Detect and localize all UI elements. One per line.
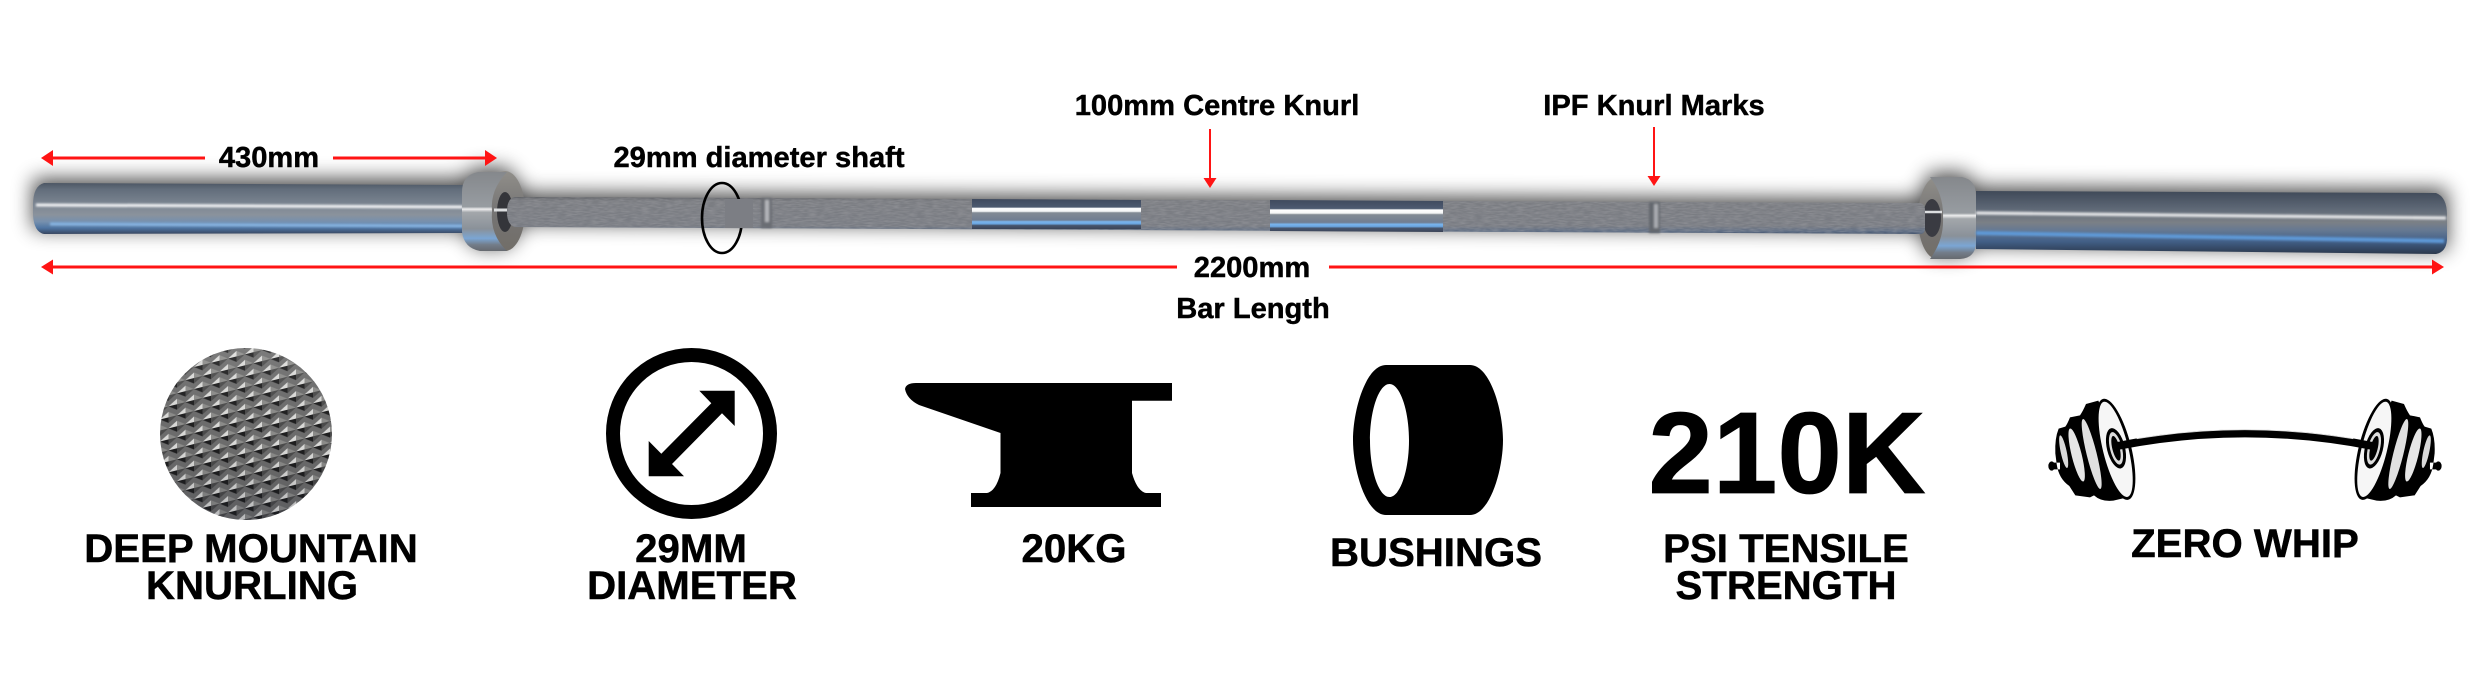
arrow: centre knurl xyxy=(1204,129,1216,188)
arrow: 2200mm bar length xyxy=(41,260,2444,274)
left IPF mark xyxy=(761,198,772,228)
icon: diameter xyxy=(613,355,770,512)
right collar back face xyxy=(1918,177,1956,259)
label: psi tensile strength xyxy=(1663,526,1909,608)
right plates xyxy=(2347,395,2442,504)
label: deep mountain knurling: DEEP MOUNTAIN xyxy=(84,526,418,571)
left plates xyxy=(2048,395,2143,504)
shaft patch over ring xyxy=(725,199,753,228)
label: 430mm: 430mm xyxy=(219,142,319,174)
smooth section right xyxy=(1270,200,1443,232)
bar drop shadow xyxy=(33,168,2447,255)
label: psi tensile strength: STRENGTH xyxy=(1675,563,1897,608)
label: zero whip: ZERO WHIP xyxy=(2131,521,2359,566)
right sleeve xyxy=(1976,191,2447,254)
arrow: IPF marks xyxy=(1648,127,1660,186)
label: Bar Length: Bar Length xyxy=(1176,293,1330,325)
label: deep mountain knurling: KNURLING xyxy=(146,563,358,608)
left sleeve xyxy=(33,183,463,234)
right collar body xyxy=(1925,177,1976,259)
29mm diameter ring xyxy=(702,183,742,253)
label: 29mm diameter shaft: 29mm diameter shaft xyxy=(613,142,905,174)
barbell photo xyxy=(33,168,2447,259)
label: 20kg: 20KG xyxy=(1022,526,1126,571)
label: IPF Knurl Marks: IPF Knurl Marks xyxy=(1543,90,1765,122)
label: 100mm Centre Knurl: 100mm Centre Knurl xyxy=(1075,90,1359,122)
stat: 210K: 210K xyxy=(1648,388,1926,518)
left collar xyxy=(462,171,525,251)
icon: whipping barbell xyxy=(2048,395,2442,504)
label: 29mm diameter xyxy=(587,526,797,608)
label: 29mm diameter: 29MM xyxy=(635,526,747,571)
icon: anvil 20kg xyxy=(905,383,1172,507)
arrow: 430mm sleeve length xyxy=(41,150,497,166)
knurled shaft xyxy=(507,197,1925,234)
label: deep mountain knurling xyxy=(84,526,418,608)
icon: bushing xyxy=(1353,365,1503,515)
curved bar xyxy=(2117,430,2373,446)
label: psi tensile strength: PSI TENSILE xyxy=(1663,526,1909,571)
label: bushings: BUSHINGS xyxy=(1330,530,1542,575)
icon: knurling texture xyxy=(160,348,332,520)
label: 29mm diameter: DIAMETER xyxy=(587,563,797,608)
label: 2200mm: 2200mm xyxy=(1194,252,1310,284)
right IPF mark xyxy=(1649,202,1660,233)
smooth section left xyxy=(972,199,1141,229)
